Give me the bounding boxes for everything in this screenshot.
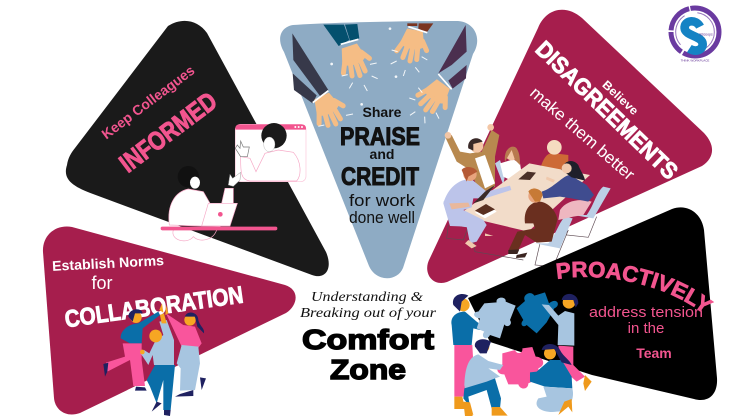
panel background: crimson triangle — [43, 227, 296, 415]
figure: man centre — [140, 313, 175, 416]
label: Team: Team — [636, 345, 672, 361]
hands — [309, 27, 456, 130]
illustration: video call — [161, 123, 306, 241]
figure: man with raised arms — [445, 124, 499, 193]
heading: DISAGREEMENTS: DISAGREEMENTS — [531, 36, 683, 184]
illustration: three people high-fiving — [103, 303, 206, 416]
figure: standing woman left — [451, 294, 483, 416]
logo S mark — [685, 21, 703, 51]
figure: woman writing — [500, 147, 532, 180]
text: make them better: make them better — [526, 83, 639, 184]
label: Establish Norms: Establish Norms — [52, 252, 165, 274]
sparkles — [318, 27, 439, 126]
title block — [300, 290, 437, 385]
title line: Understanding &: Understanding & — [311, 290, 423, 305]
heading: CREDIT: CREDIT — [341, 163, 419, 191]
figure: remote colleague waving — [235, 123, 300, 181]
logo: SScoops — [671, 8, 719, 63]
panel: establish norms for collaboration — [43, 227, 296, 416]
illustration: team assembling puzzle — [451, 292, 592, 416]
heading: INFORMED: INFORMED — [113, 86, 223, 178]
title line: Breaking out of your: Breaking out of your — [300, 306, 437, 321]
text: for: for — [91, 273, 113, 293]
label: Believe: Believe — [599, 78, 641, 118]
puzzle piece: blue — [517, 292, 558, 333]
panel background: crimson triangle — [427, 10, 712, 283]
panel: proactively address tension: PROACTIVELY — [556, 261, 714, 312]
logo ring — [671, 8, 719, 56]
illustration: four clapping hands — [292, 23, 467, 130]
label: Keep Colleagues: Keep Colleagues — [98, 62, 198, 142]
panel: share praise and credit — [280, 21, 477, 278]
heading: PRAISE: PRAISE — [340, 123, 420, 151]
label: and: and — [370, 146, 394, 162]
title: Zone: Zone — [330, 354, 406, 385]
figure: bearded man in brown — [508, 188, 557, 258]
title: Comfort: Comfort — [302, 324, 434, 355]
table — [458, 163, 590, 232]
heading: PROACTIVELY (curved) — [557, 277, 700, 311]
panel: proactively address tension — [451, 207, 718, 416]
figure: man in lilac, bun — [443, 167, 511, 248]
figure: blonde woman — [540, 140, 568, 175]
figure: woman in striped blue shirt — [533, 161, 594, 202]
puzzle piece: pink — [497, 347, 543, 388]
logo wordmark: SScoops — [699, 33, 713, 37]
text: done well: done well — [349, 208, 415, 227]
figure: colleague at laptop — [161, 166, 277, 241]
panel: believe disagreements — [427, 10, 712, 283]
panel: keep colleagues informed — [66, 21, 329, 276]
text: address tension: address tension — [589, 304, 703, 321]
panel background: blue triangle — [280, 21, 477, 278]
figure: crouching man — [463, 339, 508, 416]
hand sleeves — [292, 23, 467, 103]
figure: crouching woman — [530, 344, 573, 415]
notebook — [473, 172, 536, 218]
figure: woman left — [103, 303, 163, 391]
logo tagline: THINK WORKPLACE — [681, 59, 709, 63]
figure: woman right — [165, 305, 206, 397]
illustration: team meeting — [443, 124, 611, 267]
icon: video window — [235, 124, 306, 182]
chairs — [443, 160, 611, 267]
label: Share: Share — [363, 104, 402, 120]
panel background: black triangle — [66, 21, 329, 276]
puzzle piece: light blue — [474, 298, 516, 338]
heading: COLLABORATION: COLLABORATION — [63, 282, 245, 333]
panel background: black shape — [468, 207, 717, 400]
figure: standing woman right — [542, 294, 592, 391]
text: for work: for work — [349, 191, 416, 210]
text: in the: in the — [628, 320, 664, 337]
